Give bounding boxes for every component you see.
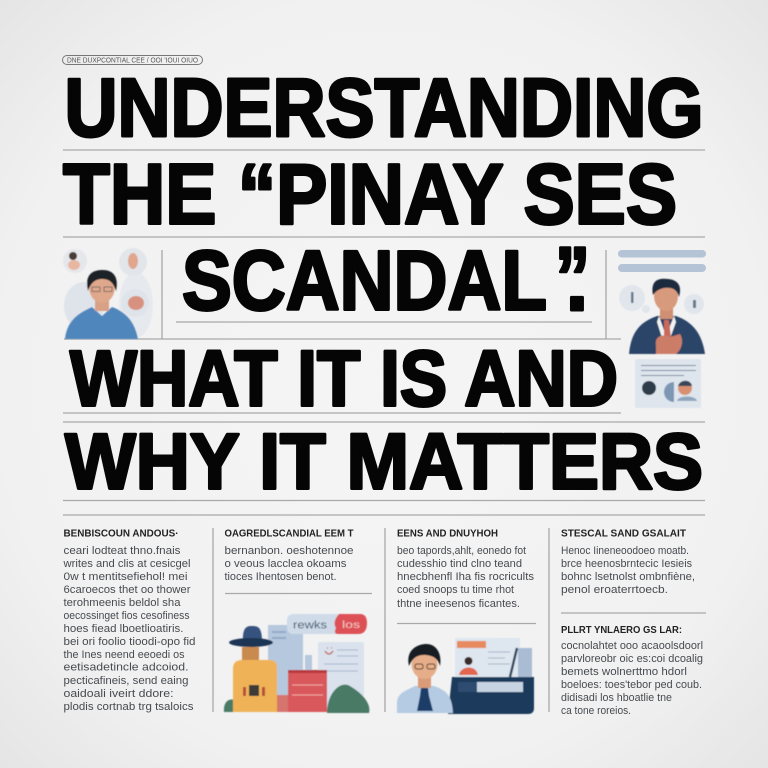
title: WHY IT MATTERS bbox=[65, 416, 703, 506]
column 2 text: bernanbon. oeshotennoe bbox=[224, 545, 354, 557]
column 2 text: tioces Ihentosen benot. bbox=[224, 571, 336, 583]
illustration: city, hat and news bubble: los bbox=[342, 620, 360, 631]
column 3 text: hnecbhenfl Iha fis rocricults bbox=[397, 571, 534, 583]
title bbox=[63, 61, 705, 515]
illustration: city, hat and news bubble: rewks bbox=[293, 620, 328, 632]
title: . bbox=[566, 234, 588, 328]
decorative bars top right bbox=[618, 250, 706, 272]
column 4 text: STESCAL SAND GSALAIT bbox=[561, 528, 687, 540]
column 1 text: eetisadetincle adcoiod. bbox=[64, 662, 188, 674]
column 3 text: cudesshio tind clno teand bbox=[397, 558, 522, 570]
title: THE “PINAY SES bbox=[63, 148, 677, 242]
illustration: man with glasses and document folder bbox=[397, 638, 534, 714]
column 4 text: boeloes: toes'tebor ped coub. bbox=[561, 679, 702, 691]
column 1 text: BENBISCOUN ANDOUS· bbox=[64, 528, 178, 540]
column 1 text: writes and clis at cesicgel bbox=[62, 558, 190, 570]
column 4 text: Henoc Iineneoodoeo moatb. bbox=[561, 545, 689, 557]
column 4 text: bohnc lsetnolst ombnfiène, bbox=[561, 571, 695, 583]
title: ” bbox=[555, 230, 590, 324]
column 3 text: coed snoops tu time rhot bbox=[397, 584, 514, 596]
column 4 text: didisadi los hboatlie tne bbox=[561, 692, 672, 704]
column 2 text: o veous lacclea okoams bbox=[224, 558, 346, 570]
column 1 text: 6caroecos thet oo thower bbox=[64, 584, 191, 596]
column 4 text: brce heenosbrntecic Iesieis bbox=[561, 558, 692, 570]
column dividers bbox=[213, 528, 549, 712]
illustration: city, hat and news bubble bbox=[224, 614, 369, 713]
column 1 text: ceari lodteat thno.fnais bbox=[64, 545, 180, 557]
column 1 text: terohmeenis beldol sha bbox=[64, 597, 181, 609]
illustration: man in navy suit bbox=[619, 279, 705, 354]
column 3 text: thtne ineesenos ficantes. bbox=[397, 598, 520, 610]
column 1 text bbox=[62, 528, 196, 713]
column 1 text: the Ines neend eeoedi os bbox=[64, 649, 184, 661]
column 4 text: parvloreobr oic es:coi dcoalig bbox=[561, 653, 703, 665]
illustration: ID card bbox=[635, 359, 701, 408]
column 1 text: pecticafineis, send eaing bbox=[64, 675, 189, 687]
title: WHAT IT IS AND bbox=[70, 334, 618, 422]
column 3 text: EENS AND DNUYHOH bbox=[397, 528, 498, 540]
column 2 text: OAGREDLSCANDIAL EEM T bbox=[224, 528, 354, 540]
column 1 text: oecossinget fios cesofiness bbox=[64, 610, 190, 622]
column 4 text: ca tone roreios. bbox=[561, 705, 631, 717]
column 1 text: plodis cortnab trg tsaloics bbox=[64, 701, 194, 713]
title: SCANDAL bbox=[182, 234, 547, 328]
column 1 text: oaidoali iveirt ddore: bbox=[64, 688, 174, 700]
top tag pill: DNE DUXPCONTIAL CEE / OOI 'IOUI OIUO bbox=[67, 58, 199, 65]
column 3 text: beo tapords,ahlt, eonedo fot bbox=[397, 545, 526, 557]
column 1 text: 0w t mentitsefiehol! mei bbox=[64, 571, 188, 583]
column 2 text bbox=[224, 528, 372, 594]
title: UNDERSTANDING bbox=[64, 61, 704, 154]
column 1 text: bei ori foolio tioodi-opo fid bbox=[64, 636, 196, 648]
illustration: man in blue sweater with thought bubbles bbox=[63, 248, 153, 339]
column 1 text: hoes fiead lboetlioatiris. bbox=[64, 623, 184, 635]
column 4 text: bemets wolnerttmo hdorl bbox=[561, 666, 687, 678]
column 4 text bbox=[561, 528, 706, 717]
column 4 text: cocnolahtet ooo acaoolsdoorl bbox=[561, 640, 703, 652]
column 4 text: penol eroaterrtoecb. bbox=[561, 584, 668, 596]
column 4 text: PLLRT YNLAERO GS LAR: bbox=[561, 625, 682, 636]
column 3 text bbox=[397, 528, 536, 624]
